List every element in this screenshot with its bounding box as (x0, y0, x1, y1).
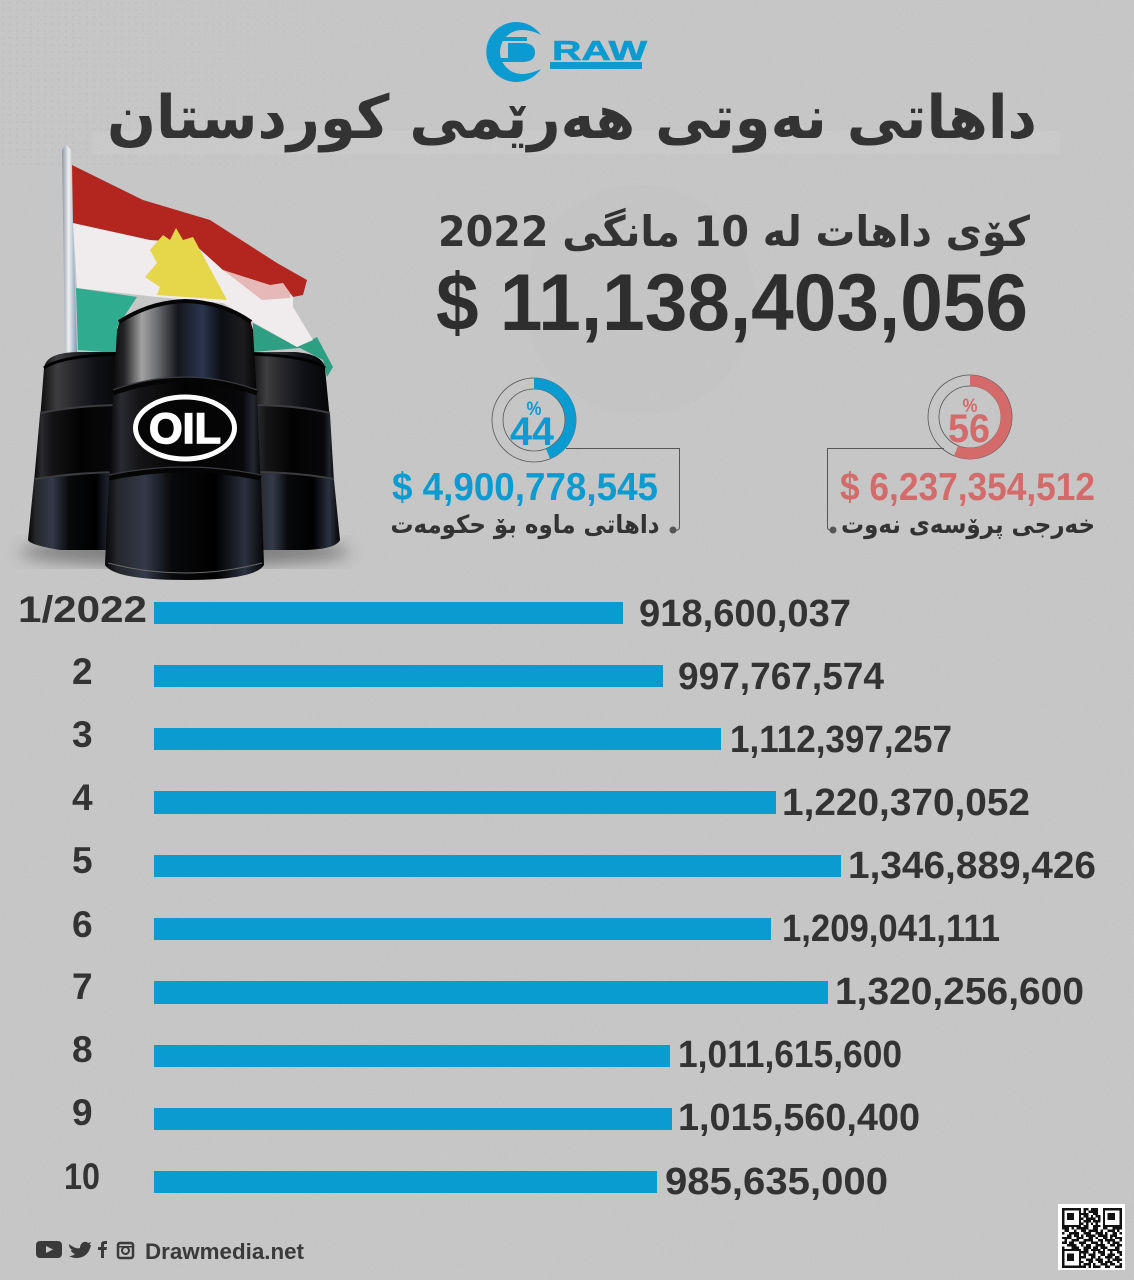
row: month 7: 1,320,256,600 (835, 971, 1084, 1013)
icon: twitter (69, 1242, 91, 1258)
flag sun (145, 228, 227, 300)
row: month 5 (72, 840, 1096, 887)
icon: youtube (36, 1241, 62, 1258)
qr code (1058, 1204, 1125, 1270)
row: month 9: 9 (72, 1092, 93, 1133)
row: month 4 (72, 777, 1030, 824)
row: month 6: 1,209,041,111 (782, 908, 1000, 950)
row: month 10 (64, 1156, 888, 1203)
donut: 44 percent: 44 (510, 410, 555, 454)
row: month 10: 985,635,000 (665, 1161, 888, 1203)
row: month 2 (72, 651, 884, 698)
row: month 9: 1,015,560,400 (678, 1097, 920, 1139)
right barrel (250, 352, 340, 550)
row: month 1 (18, 589, 851, 635)
row: month 3: 3 (72, 714, 93, 755)
illustration: oil barrels (20, 300, 350, 580)
row: month 3: 1,112,397,257 (730, 719, 952, 761)
flag green stripe left (76, 288, 137, 353)
row: month 8: 8 (72, 1029, 93, 1070)
government revenue value: $ 4,900,778,545 (392, 466, 658, 509)
bar chart: monthly revenue (18, 589, 1096, 1203)
flag green stripe right (253, 323, 333, 377)
oil label (136, 397, 234, 459)
row: month 8 (72, 1029, 902, 1076)
title: داهاتی نەوتی هەرێمی کوردستان (107, 83, 1037, 153)
row: month 5: 1,346,889,426 (848, 845, 1096, 887)
total revenue value: $ 11,138,403,056 (436, 258, 1028, 348)
row: month 4: 4 (72, 777, 93, 818)
total revenue heading: کۆی داهات لە 10 مانگی 2022 (438, 207, 1031, 257)
icon: facebook (98, 1241, 107, 1258)
row: month 1: 918,600,037 (639, 593, 851, 635)
logo: Draw: RAW (552, 35, 648, 66)
flag pole (62, 144, 77, 353)
barrel shadow (20, 538, 350, 566)
row: month 1: 1/2022 (18, 589, 147, 630)
illustration: Kurdistan flag (62, 144, 333, 377)
flag white stripe (73, 223, 313, 347)
row: month 2: 997,767,574 (678, 656, 884, 698)
row: month 2: 2 (72, 651, 93, 692)
flag pink fold (223, 270, 293, 300)
flag red stripe (72, 165, 307, 297)
government revenue label: داهاتی ماوە بۆ حکومەت (390, 510, 660, 540)
logo: Draw (486, 22, 648, 82)
icon: instagram (117, 1243, 134, 1258)
left barrel (28, 352, 125, 550)
footer: website: Drawmedia.net (145, 1239, 305, 1264)
row: month 5: 5 (72, 840, 93, 881)
oil label: OIL (149, 405, 221, 453)
row: month 4: 1,220,370,052 (782, 782, 1030, 824)
donut: 56 percent: % (962, 396, 978, 417)
row: month 9 (72, 1092, 920, 1139)
oil process cost label: خەرجی پرۆسەی نەوت (841, 510, 1095, 540)
donut: 56 percent: 56 (948, 407, 990, 451)
row: month 6: 6 (72, 904, 93, 945)
row: month 6 (72, 904, 1000, 950)
row: month 10: 10 (64, 1156, 100, 1197)
donut: 44 percent (492, 378, 576, 462)
leader line: government share (566, 448, 680, 534)
leader line: oil process cost (828, 448, 944, 534)
row: month 7 (72, 966, 1084, 1013)
donut: 56 percent (928, 375, 1012, 459)
oil process cost value: $ 6,237,354,512 (840, 466, 1095, 509)
centre barrel (105, 300, 264, 580)
row: month 8: 1,011,615,600 (678, 1034, 902, 1076)
row: month 3 (72, 714, 952, 761)
donut: 44 percent: % (526, 399, 542, 420)
footer: social icons (36, 1241, 134, 1258)
row: month 7: 7 (72, 966, 93, 1007)
background (2, 2, 100, 164)
